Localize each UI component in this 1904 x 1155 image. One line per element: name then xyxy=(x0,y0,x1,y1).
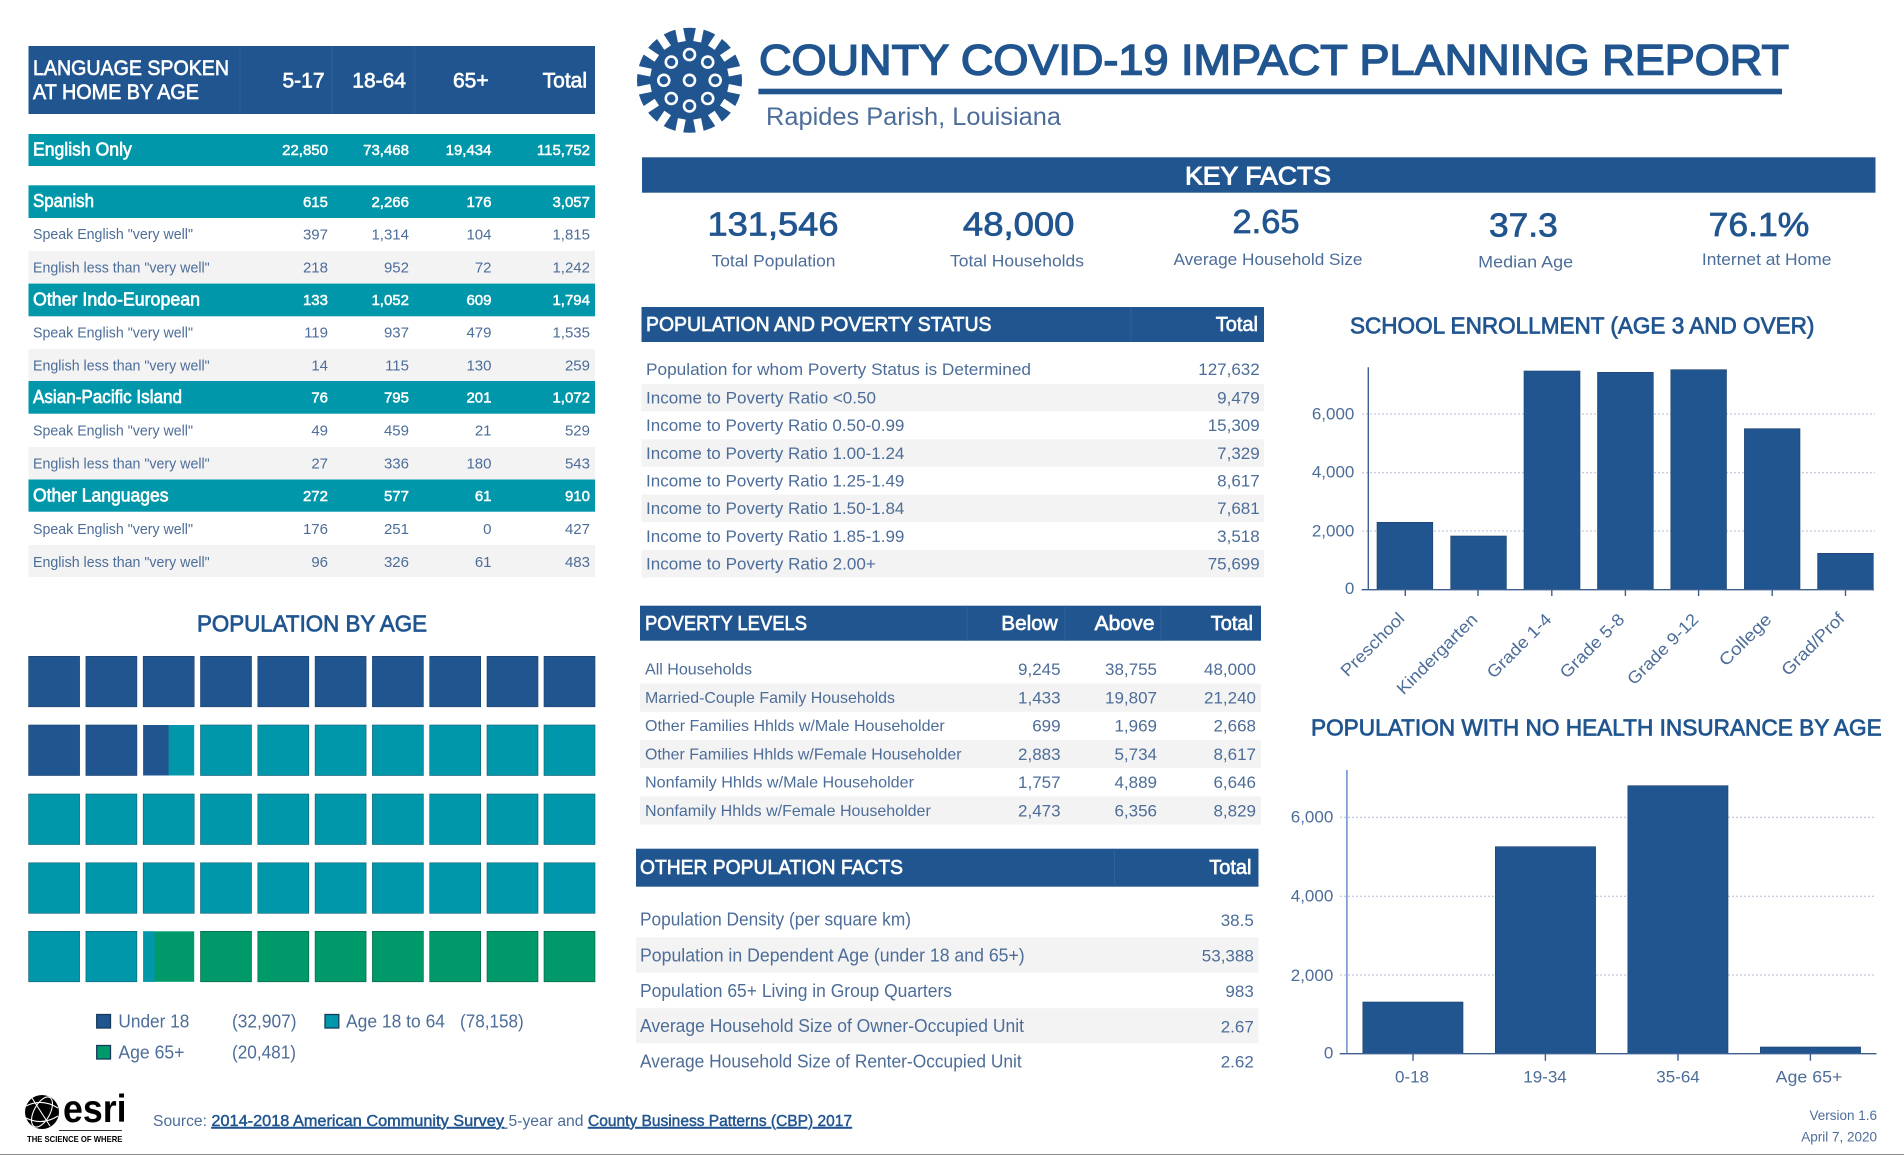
table rows: 9,245 xyxy=(1018,660,1061,679)
row: Indo-European English less than very well: 115 xyxy=(385,358,409,374)
y axis labels: 6,000 xyxy=(1312,404,1354,424)
row: English Only: English Only xyxy=(33,140,132,160)
logo: esri: THE SCIENCE OF WHERE xyxy=(27,1134,123,1144)
stat: average household size: 2.65 xyxy=(1232,203,1300,240)
row: Spanish English less than very well: 72 xyxy=(475,260,492,276)
panel: population and poverty status xyxy=(642,307,1264,578)
y axis labels: 6,000 xyxy=(1291,808,1333,827)
table rows: Average Household Size of Renter-Occupied Unit xyxy=(640,1052,1022,1072)
table rows: Income to Poverty Ratio 1.50-1.84 xyxy=(646,499,904,518)
table rows: 15,309 xyxy=(1208,416,1260,435)
row: Other Languages English less than very well xyxy=(28,545,595,577)
source line: County Business Patterns (CBP) 2017 xyxy=(588,1113,852,1130)
table rows: Income to Poverty Ratio <0.50 xyxy=(646,388,876,408)
table rows: 2.62 xyxy=(1221,1053,1254,1072)
y axis labels: 0 xyxy=(1345,579,1354,598)
stat: internet at home: 76.1% xyxy=(1709,206,1809,243)
table rows: Population for whom Poverty Status is Determined xyxy=(646,360,1031,379)
row: Spanish speak English very well: 1,815 xyxy=(552,226,590,243)
table header xyxy=(640,606,1261,641)
legend item: age 65+ xyxy=(97,1042,296,1062)
stat: total population: 131,546 xyxy=(708,206,838,243)
table rows: 38.5 xyxy=(1221,911,1254,930)
heading: population by age: POPULATION BY AGE xyxy=(197,610,427,636)
row: Other Languages speak English very well: Speak English "very well" xyxy=(33,522,193,538)
table header: 18-64 xyxy=(352,70,406,93)
legend item: age 18 to 64 xyxy=(325,1012,524,1032)
row: Indo-European English less than very well: 259 xyxy=(565,358,590,374)
stat: internet at home: Internet at Home xyxy=(1702,250,1831,269)
x axis labels xyxy=(1337,609,1849,698)
x axis labels xyxy=(1395,1067,1842,1086)
bar chart: school enrollment xyxy=(1312,367,1875,698)
row: Other Languages speak English very well xyxy=(33,521,590,538)
x axis labels: Grade 5-8 xyxy=(1556,610,1628,682)
legend item: age 18 to 64: (78,158) xyxy=(460,1012,524,1032)
row: Spanish: 2,266 xyxy=(371,194,409,211)
row: Asian-Pacific English less than very well: 27 xyxy=(311,456,328,472)
table rows: Income to Poverty Ratio 1.25-1.49 xyxy=(646,472,904,490)
x axis labels: 19-34 xyxy=(1523,1067,1567,1086)
table header: Above xyxy=(1094,613,1154,635)
table header: POPULATION AND POVERTY STATUS xyxy=(646,314,992,336)
row: Asian-Pacific speak English very well: 21 xyxy=(475,422,492,440)
table rows: 8,617 xyxy=(1217,472,1260,490)
table rows xyxy=(640,910,1254,1072)
row: Asian-Pacific Island: 201 xyxy=(466,390,492,407)
version and date: April 7, 2020 xyxy=(1801,1130,1877,1145)
row: Spanish English less than very well xyxy=(28,251,595,284)
source line: 5-year and xyxy=(508,1113,584,1130)
heading: no health insurance: POPULATION WITH NO HEALTH INSURANCE BY AGE xyxy=(1311,715,1882,741)
table rows: 2,883 xyxy=(1018,745,1061,764)
x axis labels: Kindergarten xyxy=(1393,610,1481,698)
x axis labels: 0-18 xyxy=(1395,1067,1429,1086)
row: Asian-Pacific Island: Asian-Pacific Island xyxy=(33,387,182,407)
table rows xyxy=(646,360,1260,574)
row: Asian-Pacific Island: 76 xyxy=(311,390,328,407)
table rows: Average Household Size of Owner-Occupied Unit xyxy=(640,1016,1024,1036)
table header: Total xyxy=(1209,857,1252,879)
source line: Source: xyxy=(153,1113,207,1130)
x axis labels: College xyxy=(1715,610,1775,670)
row: English Only: 73,468 xyxy=(363,142,409,159)
table header xyxy=(28,46,595,114)
row: Spanish xyxy=(28,185,595,218)
row: Indo-European speak English very well: 1,535 xyxy=(552,325,590,342)
table rows xyxy=(645,660,1256,820)
row: Spanish English less than very well: 1,242 xyxy=(552,260,590,276)
row: Other Languages English less than very well: 96 xyxy=(311,554,328,571)
table header: 5-17 xyxy=(282,70,324,93)
row: Other Languages English less than very well: 483 xyxy=(565,554,590,571)
stat: median age: Median Age xyxy=(1478,252,1573,272)
row: Other Languages speak English very well: 176 xyxy=(303,521,328,538)
panel: poverty levels xyxy=(640,606,1261,825)
table rows: 21,240 xyxy=(1204,688,1256,708)
table rows: 2,668 xyxy=(1213,717,1256,736)
table rows: 53,388 xyxy=(1202,947,1254,966)
stat: total households: Total Households xyxy=(950,252,1084,271)
row: Indo-European speak English very well: 119 xyxy=(304,325,328,342)
row: Other Indo-European: 133 xyxy=(303,292,328,309)
table rows: Income to Poverty Ratio 1.00-1.24 xyxy=(646,444,904,463)
key facts banner xyxy=(642,157,1876,193)
row: Asian-Pacific English less than very well: 336 xyxy=(384,456,409,472)
stat: total population: Total Population xyxy=(712,252,836,271)
table rows: 1,433 xyxy=(1018,688,1061,708)
row: Asian-Pacific speak English very well: 459 xyxy=(384,422,409,440)
table rows: Other Families Hhlds w/Female Householder xyxy=(645,746,962,764)
row: Other Indo-European: 1,052 xyxy=(371,292,409,309)
legend: population by age xyxy=(97,1012,524,1062)
row: Indo-European English less than very well: English less than "very well" xyxy=(33,358,210,374)
logo: esri xyxy=(25,1088,126,1144)
table rows: Population 65+ Living in Group Quarters xyxy=(640,981,952,1001)
row: Spanish speak English very well: 1,314 xyxy=(371,226,409,243)
row: Asian-Pacific Island xyxy=(28,381,595,414)
row: Other Languages: 61 xyxy=(475,488,492,505)
row: Other Languages: 272 xyxy=(303,488,328,505)
table rows: 983 xyxy=(1225,982,1254,1001)
row: Indo-European speak English very well xyxy=(33,325,590,342)
row: Spanish English less than very well: English less than "very well" xyxy=(33,260,210,276)
row: Asian-Pacific Island: 1,072 xyxy=(552,390,590,407)
table rows: Married-Couple Family Households xyxy=(645,690,895,707)
table rows: 3,518 xyxy=(1217,527,1260,546)
table rows: 8,829 xyxy=(1213,801,1256,820)
table rows: 2,473 xyxy=(1018,801,1061,820)
x axis labels: Grad/Prof xyxy=(1778,609,1849,680)
table rows: 699 xyxy=(1032,717,1061,736)
row: Other Indo-European: 1,794 xyxy=(552,292,590,309)
table rows: Income to Poverty Ratio 0.50-0.99 xyxy=(646,416,904,435)
table header: AT HOME BY AGE xyxy=(33,81,199,104)
legend item: under 18: Under 18 xyxy=(118,1012,189,1032)
bars xyxy=(1377,370,1873,590)
stat: total households xyxy=(950,206,1084,271)
panel: other population facts xyxy=(636,849,1258,1072)
table rows: Nonfamily Hhlds w/Male Householder xyxy=(645,774,915,792)
table rows: 2.67 xyxy=(1221,1017,1254,1036)
row: Spanish speak English very well: Speak English "very well" xyxy=(33,227,193,243)
row: Indo-European English less than very well: 14 xyxy=(311,358,328,374)
table header: OTHER POPULATION FACTS xyxy=(640,857,903,879)
row: Asian-Pacific speak English very well: 529 xyxy=(565,422,590,440)
table rows: 1,757 xyxy=(1018,773,1061,792)
row: Spanish speak English very well: 104 xyxy=(466,226,492,243)
row: Asian-Pacific English less than very well: English less than "very well" xyxy=(33,456,210,472)
heading: school enrollment: SCHOOL ENROLLMENT (AGE 3 AND OVER) xyxy=(1350,312,1814,338)
stat: average household size xyxy=(1174,203,1362,269)
row: Spanish English less than very well: 952 xyxy=(384,260,409,276)
x axis labels: Grade 1-4 xyxy=(1483,610,1555,682)
row: Indo-European English less than very well: 130 xyxy=(466,358,492,374)
row: Other Indo-European: 609 xyxy=(466,292,492,309)
stat: median age xyxy=(1478,207,1573,272)
table rows: Other Families Hhlds w/Male Householder xyxy=(645,718,945,735)
table rows: 7,329 xyxy=(1217,444,1260,463)
table rows: 48,000 xyxy=(1204,660,1256,679)
table rows: 5,734 xyxy=(1114,745,1157,764)
row: Other Languages: 577 xyxy=(384,488,409,505)
row: English Only: 19,434 xyxy=(446,142,492,159)
row: Other Languages: Other Languages xyxy=(33,485,168,505)
legend item: under 18 xyxy=(97,1012,296,1032)
table rows: Population in Dependent Age (under 18 and 65+) xyxy=(640,946,1025,966)
title: COUNTY COVID-19 IMPACT PLANNING REPORT xyxy=(759,36,1789,84)
table rows: 7,681 xyxy=(1217,499,1260,518)
row: Asian-Pacific English less than very well: 180 xyxy=(466,456,492,472)
row: Asian-Pacific Island: 795 xyxy=(384,390,409,407)
panel: language spoken at home table xyxy=(28,46,595,577)
source line xyxy=(153,1113,852,1130)
table header: Total xyxy=(543,70,587,93)
table header: POVERTY LEVELS xyxy=(645,613,807,635)
row: Other Languages: 910 xyxy=(565,488,590,505)
row: Asian-Pacific speak English very well: Speak English "very well" xyxy=(33,423,193,439)
table header: Total xyxy=(1211,613,1253,635)
table rows: Nonfamily Hhlds w/Female Householder xyxy=(645,803,931,820)
bars xyxy=(1363,786,1861,1054)
logo: esri: esri xyxy=(63,1088,126,1131)
stat: internet at home xyxy=(1702,206,1831,269)
y axis labels: 4,000 xyxy=(1291,887,1333,906)
y axis labels xyxy=(1312,404,1354,598)
table rows: All Households xyxy=(645,662,752,678)
row: Asian-Pacific English less than very well xyxy=(28,447,595,480)
row: Spanish speak English very well: 397 xyxy=(303,226,328,243)
row: Other Languages English less than very well: 61 xyxy=(475,554,492,571)
bar chart: no health insurance by age xyxy=(1291,770,1876,1086)
table rows: 38,755 xyxy=(1105,660,1157,679)
table rows: Population Density (per square km) xyxy=(640,910,911,930)
row: English Only: 22,850 xyxy=(282,142,328,159)
row: Other Languages speak English very well: 251 xyxy=(384,521,409,538)
legend item: under 18: (32,907) xyxy=(232,1012,296,1032)
key facts banner: KEY FACTS xyxy=(1185,162,1331,190)
table rows: Income to Poverty Ratio 1.85-1.99 xyxy=(646,527,904,546)
row: English Only: 115,752 xyxy=(537,142,590,159)
version and date: Version 1.6 xyxy=(1809,1108,1877,1123)
stat: average household size: Average Household Size xyxy=(1174,250,1362,269)
chart: population by age waffle xyxy=(29,656,595,982)
row: English Only xyxy=(28,134,595,166)
stat: median age: 37.3 xyxy=(1489,207,1558,244)
table rows: 4,889 xyxy=(1114,773,1157,792)
legend item: age 18 to 64: Age 18 to 64 xyxy=(346,1012,445,1032)
table rows: 9,479 xyxy=(1217,388,1260,408)
x axis labels: 35-64 xyxy=(1656,1067,1700,1086)
y axis labels: 2,000 xyxy=(1312,521,1354,540)
table rows: 75,699 xyxy=(1208,554,1260,574)
table header xyxy=(636,849,1258,887)
x axis labels: Age 65+ xyxy=(1776,1067,1842,1086)
row: Spanish: 176 xyxy=(466,194,492,211)
row: Other Languages speak English very well: 427 xyxy=(565,521,590,538)
x axis labels: Grade 9-12 xyxy=(1623,610,1702,689)
stat: total households: 48,000 xyxy=(963,206,1074,243)
row: Indo-European English less than very well xyxy=(28,349,595,381)
table rows: 19,807 xyxy=(1105,688,1157,708)
subtitle: Rapides Parish, Louisiana xyxy=(766,103,1061,131)
table rows: 1,969 xyxy=(1114,717,1157,736)
row: Other Languages English less than very well: 326 xyxy=(384,554,409,571)
row: Spanish: 615 xyxy=(303,194,328,211)
row: Other Indo-European xyxy=(28,284,595,316)
table rows: 127,632 xyxy=(1198,360,1260,379)
y axis labels: 2,000 xyxy=(1291,966,1333,985)
row: Indo-European speak English very well: 937 xyxy=(384,325,409,342)
table header: LANGUAGE SPOKEN xyxy=(33,57,229,80)
table rows: 8,617 xyxy=(1213,745,1256,764)
icon: coronavirus xyxy=(635,26,744,134)
row: Other Languages speak English very well: 0 xyxy=(483,521,492,538)
table rows: Income to Poverty Ratio 2.00+ xyxy=(646,554,876,574)
x axis labels: Preschool xyxy=(1337,609,1408,680)
row: Spanish: Spanish xyxy=(33,191,94,211)
legend item: age 65+: Age 65+ xyxy=(118,1042,184,1062)
row: Asian-Pacific English less than very well: 543 xyxy=(565,456,590,472)
y axis labels: 4,000 xyxy=(1312,463,1354,482)
stat: total population xyxy=(708,206,838,271)
table header xyxy=(642,307,1264,342)
y axis labels xyxy=(1291,808,1333,1063)
y axis labels: 0 xyxy=(1324,1044,1333,1063)
table rows: 6,356 xyxy=(1114,801,1157,820)
row: Other Indo-European: Other Indo-European xyxy=(33,289,200,309)
row: Other Languages xyxy=(28,480,595,512)
row: Other Languages English less than very well: English less than "very well" xyxy=(33,555,210,571)
table header: Below xyxy=(1001,613,1058,635)
table header: 65+ xyxy=(453,70,489,93)
row: Indo-European speak English very well: Speak English "very well" xyxy=(33,326,193,342)
row: Spanish: 3,057 xyxy=(552,194,590,211)
table rows: 6,646 xyxy=(1213,773,1256,792)
source line: 2014-2018 American Community Survey xyxy=(211,1113,504,1130)
row: Asian-Pacific speak English very well xyxy=(33,422,590,440)
legend item: age 65+: (20,481) xyxy=(232,1042,296,1062)
row: Spanish speak English very well xyxy=(33,226,590,243)
row: Asian-Pacific speak English very well: 49 xyxy=(311,422,328,440)
version and date xyxy=(1801,1108,1877,1145)
row: Spanish English less than very well: 218 xyxy=(303,260,328,276)
table header: Total xyxy=(1216,314,1258,336)
row: Indo-European speak English very well: 479 xyxy=(466,325,492,342)
